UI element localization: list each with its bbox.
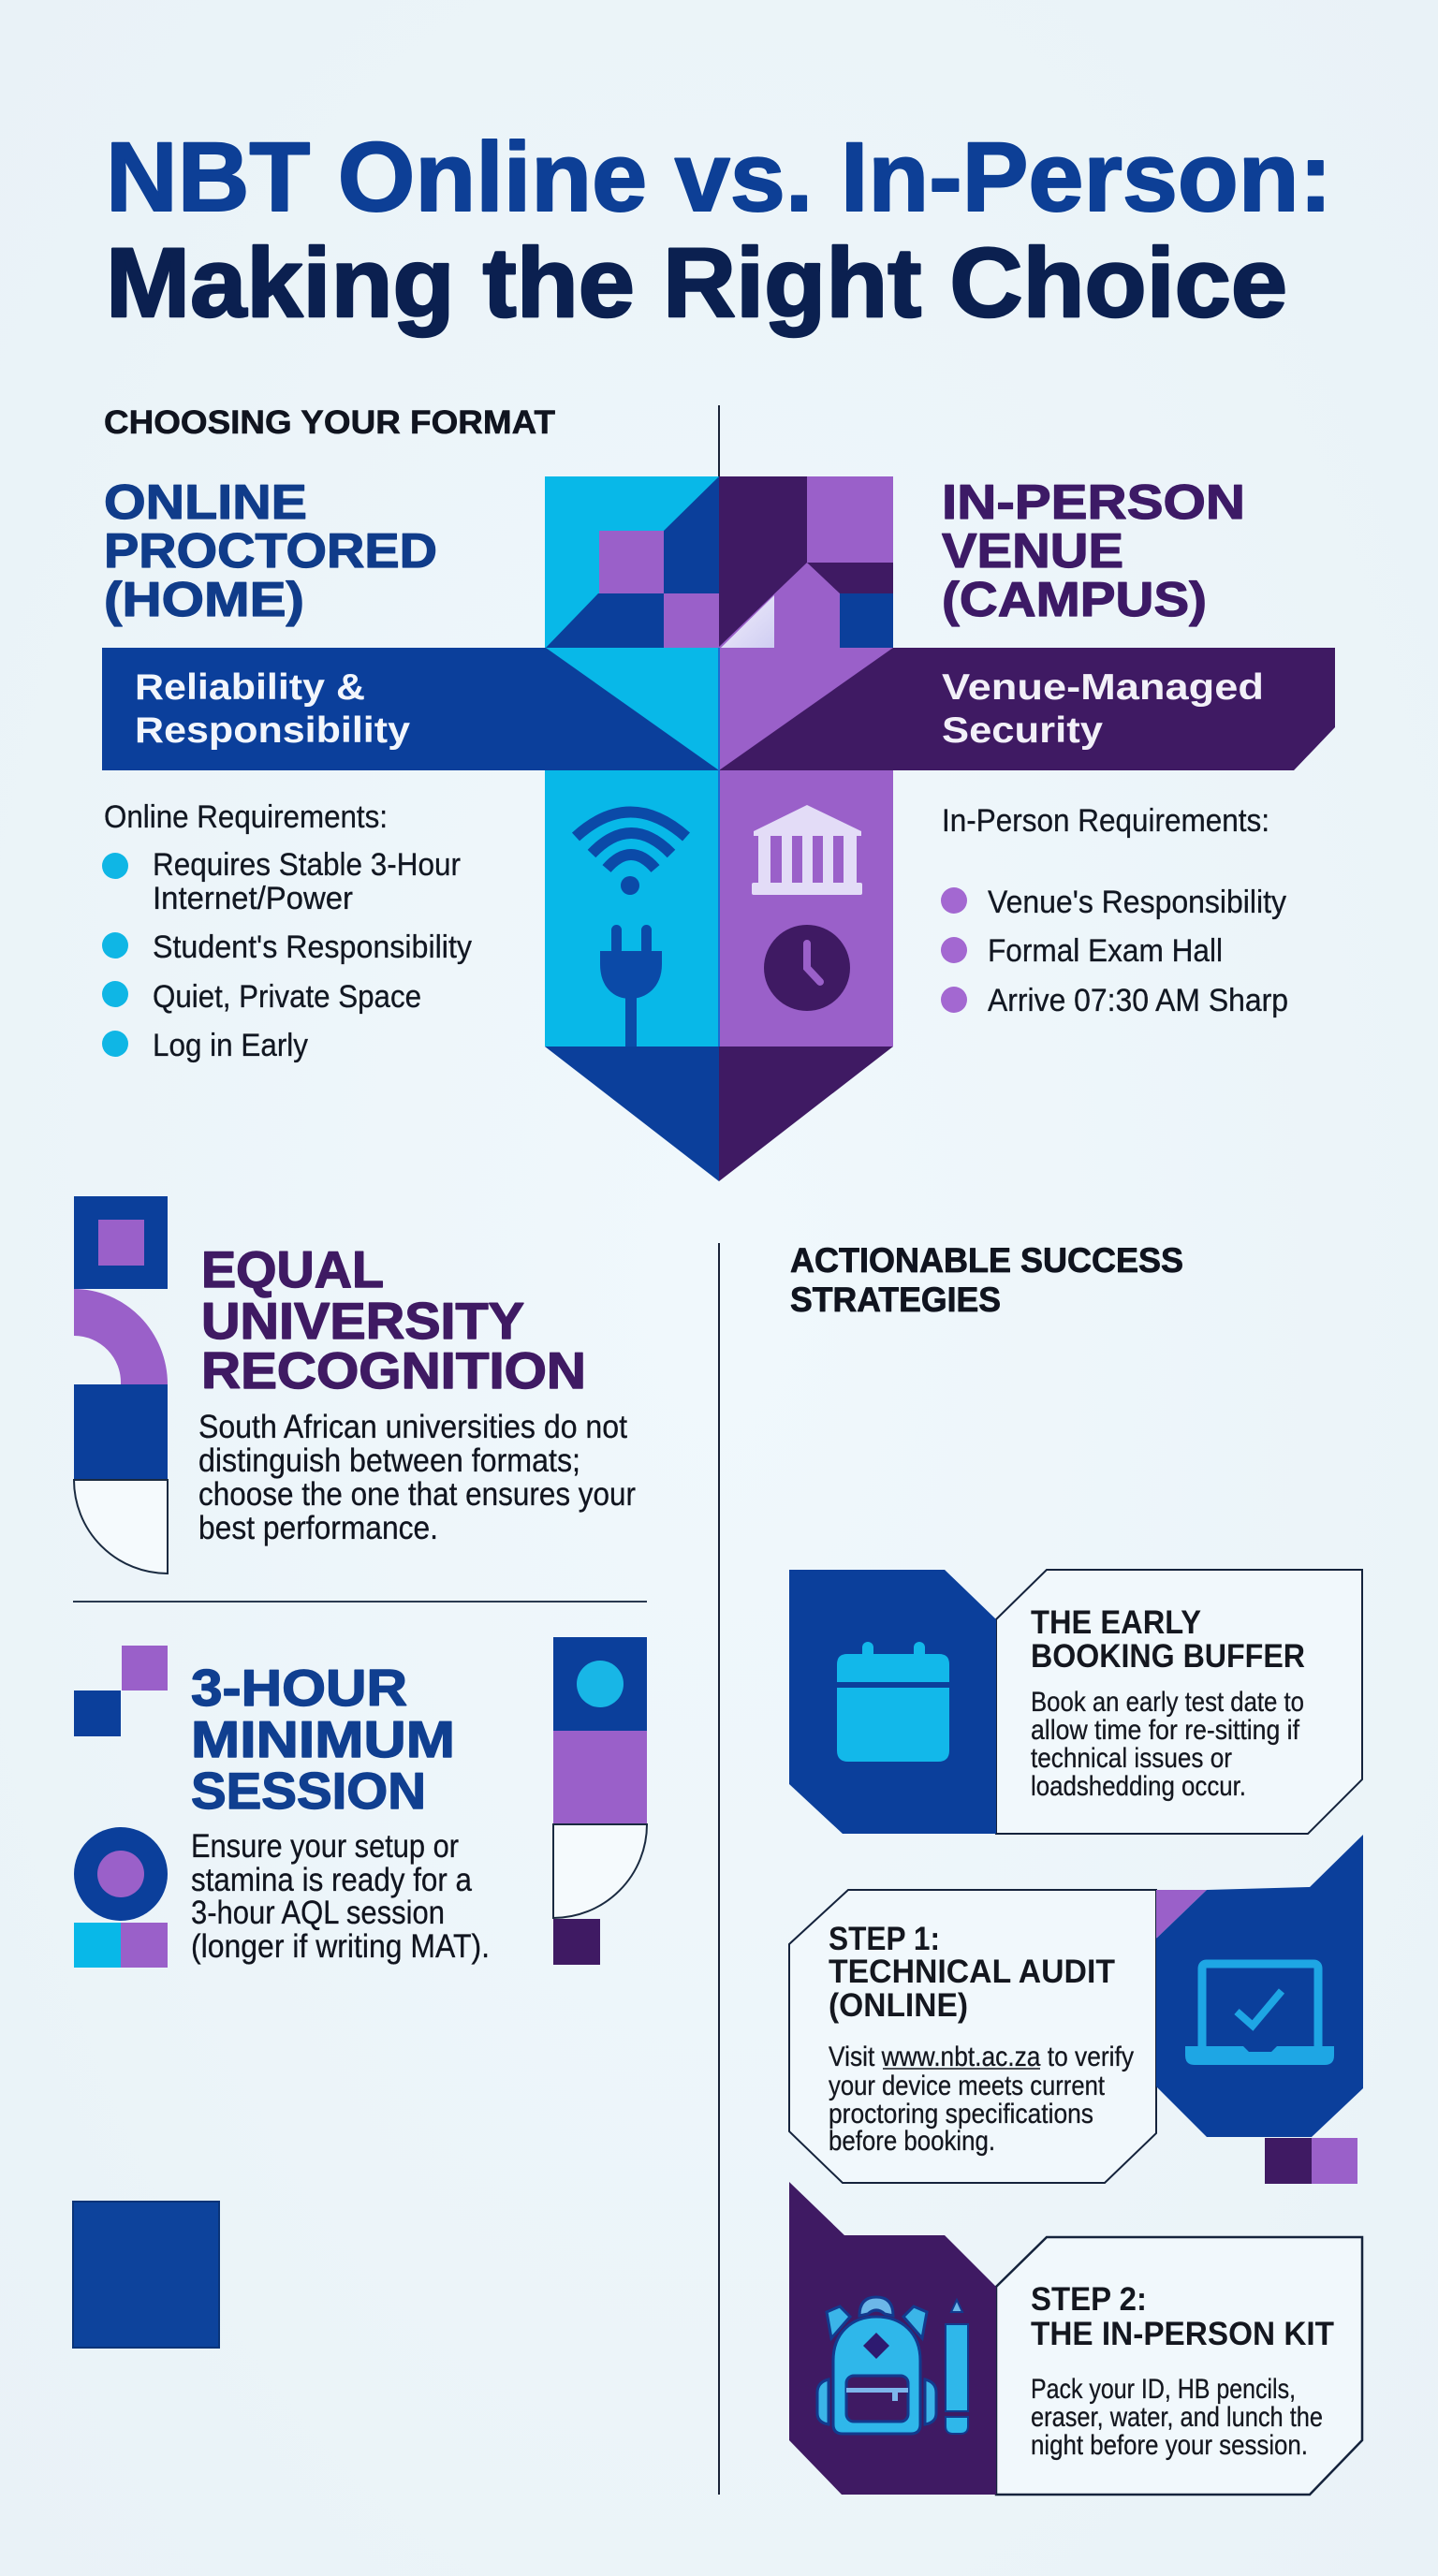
card heading: STEP 2: xyxy=(1031,2281,1147,2318)
heading: online proctored: ONLINE xyxy=(104,476,307,530)
card text xyxy=(1031,1687,1304,1802)
in-person requirements list: Formal Exam Hall xyxy=(988,933,1223,969)
card body xyxy=(996,2237,1362,2495)
heading: equal university recognition: EQUAL xyxy=(201,1240,384,1298)
card body xyxy=(789,1890,1156,2183)
card text: technical issues or xyxy=(1031,1743,1232,1774)
purple wedge xyxy=(719,648,893,770)
text: equal recognition description xyxy=(198,1409,636,1546)
card heading xyxy=(1031,2281,1334,2352)
icon: small squares xyxy=(74,1646,168,1736)
online requirements list: Quiet, Private Space xyxy=(153,979,421,1015)
card icon panel xyxy=(789,2182,996,2495)
card heading: THE IN-PERSON KIT xyxy=(1031,2316,1334,2352)
text: 3-hour description: (longer if writing MAT). xyxy=(191,1928,490,1965)
card text: allow time for re-sitting if xyxy=(1031,1715,1300,1746)
icon: clock xyxy=(764,925,850,1011)
card heading xyxy=(1031,1604,1305,1675)
dark purple band xyxy=(719,648,1335,770)
heading: in-person venue: IN-PERSON xyxy=(942,476,1245,530)
card: early booking buffer xyxy=(789,1570,1362,1834)
heading: 3-hour minimum session: SESSION xyxy=(191,1762,426,1820)
lower left cyan panel xyxy=(545,770,719,1046)
card text: Visit www.nbt.ac.za to verify xyxy=(829,2042,1134,2072)
card heading: BOOKING BUFFER xyxy=(1031,1638,1305,1675)
small squares xyxy=(1265,2138,1357,2184)
heading: in-person venue: (CAMPUS) xyxy=(942,573,1207,627)
band text: reliability and responsibility: Reliability & xyxy=(135,667,365,708)
heading: equal university recognition: UNIVERSITY xyxy=(201,1292,524,1350)
heading: online proctored xyxy=(104,476,437,627)
online requirements list xyxy=(102,799,472,1063)
geometric column: session xyxy=(553,1637,647,1965)
heading: actionable success strategies: STRATEGIES xyxy=(790,1281,1001,1319)
card icon panel xyxy=(789,1570,996,1834)
card text: proctoring specifications xyxy=(829,2099,1093,2130)
icon: laptop with check xyxy=(1185,1964,1334,2065)
text: 3-hour description: stamina is ready for a xyxy=(191,1862,472,1898)
heading: online proctored: (HOME) xyxy=(104,573,304,627)
card body xyxy=(996,1570,1362,1834)
heading: in-person venue xyxy=(942,476,1245,627)
in-person requirements list xyxy=(941,803,1288,1018)
card text xyxy=(1031,2374,1323,2461)
card text: Pack your ID, HB pencils, xyxy=(1031,2374,1296,2405)
heading: 3-hour minimum session: 3-HOUR xyxy=(191,1659,407,1717)
text: 3-hour description: 3-hour AQL session xyxy=(191,1895,445,1931)
band text: venue-managed security: Security xyxy=(942,710,1103,751)
band text: reliability and responsibility xyxy=(135,667,410,751)
heading: choosing your format: CHOOSING YOUR FORMAT xyxy=(104,404,555,441)
card heading: TECHNICAL AUDIT xyxy=(829,1954,1115,1990)
text: equal recognition description: best performance. xyxy=(198,1510,438,1546)
icon: plug xyxy=(600,925,662,1046)
icon: university building xyxy=(752,805,862,895)
online requirements list: Requires Stable 3-Hour xyxy=(153,847,461,883)
card text: eraser, water, and lunch the xyxy=(1031,2402,1323,2433)
card heading xyxy=(829,1921,1115,2024)
card heading: STEP 1: xyxy=(829,1921,940,1957)
card text xyxy=(829,2042,1134,2157)
card icon panel xyxy=(1156,1835,1363,2137)
cyan wedge xyxy=(546,648,719,770)
icon: pencil xyxy=(946,2300,968,2434)
heading: 3-hour minimum session xyxy=(191,1659,455,1820)
top left geometric block xyxy=(545,476,719,648)
text: equal recognition description: distinguish between formats; xyxy=(198,1442,580,1479)
right chevron xyxy=(719,1046,893,1181)
top right geometric block xyxy=(719,476,893,648)
icon: calendar xyxy=(837,1642,949,1762)
band text: reliability and responsibility: Responsibility xyxy=(135,710,410,751)
card text: your device meets current xyxy=(829,2071,1106,2101)
heading: online proctored: PROCTORED xyxy=(104,524,437,578)
card text: Book an early test date to xyxy=(1031,1687,1304,1718)
text: 3-hour description: Ensure your setup or xyxy=(191,1828,459,1865)
heading: 3-hour minimum session: MINIMUM xyxy=(191,1710,455,1768)
band text: venue-managed security: Venue-Managed xyxy=(942,667,1264,708)
in-person requirements list: Venue's Responsibility xyxy=(988,885,1286,920)
online requirements list: Log in Early xyxy=(153,1028,308,1063)
left chevron xyxy=(545,1046,719,1181)
card: technical audit xyxy=(789,1835,1363,2184)
card text: loadshedding occur. xyxy=(1031,1771,1246,1802)
in-person requirements list: In-Person Requirements: xyxy=(942,803,1269,839)
heading: equal university recognition: RECOGNITION xyxy=(201,1341,586,1399)
card heading: (ONLINE) xyxy=(829,1987,968,2024)
title xyxy=(106,123,1332,338)
title: Making the Right Choice xyxy=(106,228,1287,338)
text: equal recognition description: South African universities do not xyxy=(198,1409,627,1445)
title: NBT Online vs. In-Person: xyxy=(106,123,1332,232)
card: in-person kit xyxy=(789,2182,1362,2495)
central comparison graphic xyxy=(102,476,1335,1181)
card text: night before your session. xyxy=(1031,2430,1308,2461)
card heading: THE EARLY xyxy=(1031,1604,1201,1641)
band text: venue-managed security xyxy=(942,667,1264,751)
heading: in-person venue: VENUE xyxy=(942,524,1123,578)
purple accent xyxy=(1156,1890,1207,1939)
icon: wifi xyxy=(576,812,686,895)
in-person requirements list: Arrive 07:30 AM Sharp xyxy=(988,983,1288,1018)
lower right purple panel xyxy=(719,770,893,1046)
blue band xyxy=(102,648,719,770)
heading: actionable success strategies xyxy=(790,1241,1183,1319)
icon: ring and squares xyxy=(74,1827,168,1968)
card text: before booking. xyxy=(829,2126,995,2157)
online requirements list: Internet/Power xyxy=(153,881,353,916)
geometric column: equal recognition xyxy=(74,1196,168,1573)
online requirements list: Student's Responsibility xyxy=(153,929,472,965)
online requirements list: Online Requirements: xyxy=(104,799,388,835)
heading: equal university recognition xyxy=(201,1240,586,1399)
text: equal recognition description: choose the one that ensures your xyxy=(198,1476,636,1513)
text: 3-hour description xyxy=(191,1828,490,1965)
heading: actionable success strategies: ACTIONABLE SUCCESS xyxy=(790,1241,1183,1280)
decorative blue square xyxy=(73,2202,219,2348)
icon: backpack xyxy=(817,2297,936,2434)
